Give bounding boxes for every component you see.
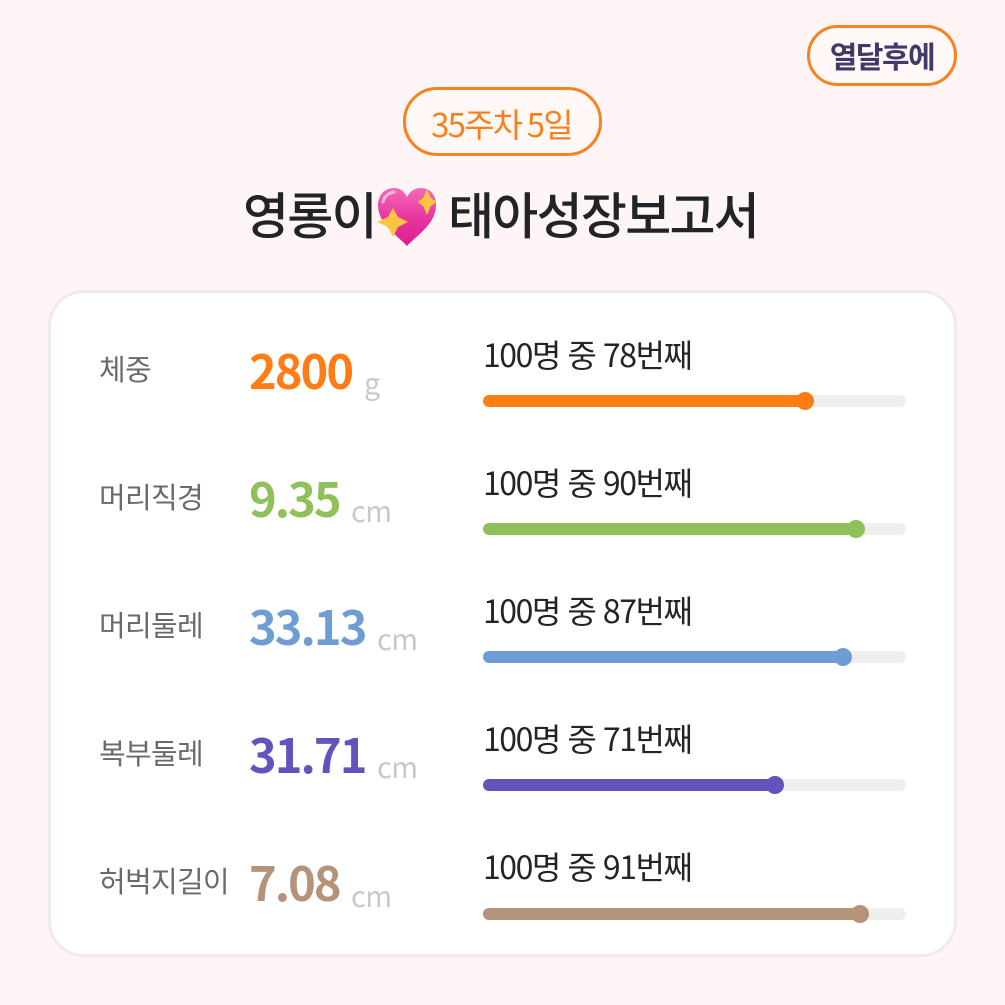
progress bar: abdominal circumference xyxy=(483,779,906,791)
title text: report: 태아성장보고서 xyxy=(448,177,758,249)
unit: cm: cm xyxy=(351,489,392,531)
progress bar: femur length xyxy=(483,908,906,920)
value: femur length: 7.08 xyxy=(249,846,340,915)
unit: cm: cm xyxy=(351,874,392,916)
row: weight xyxy=(99,331,906,410)
rank: head diameter: 100명 중 90번째 xyxy=(483,459,692,505)
label: head diameter: 머리직경 xyxy=(99,475,203,517)
progress bar: head circumference xyxy=(483,651,906,663)
button: after one month: 열달후에 xyxy=(830,33,934,77)
row: head circumference xyxy=(99,587,906,666)
label: weight: 체중 xyxy=(99,347,151,389)
row: abdominal circumference xyxy=(99,715,906,794)
title xyxy=(243,177,758,249)
value: head diameter: 9.35 xyxy=(249,462,340,531)
row: femur length xyxy=(99,843,906,923)
rank: head circumference: 100명 중 87번째 xyxy=(483,587,692,633)
badge: week and day: 35주차 5일 xyxy=(431,99,572,147)
label: femur length: 허벅지길이 xyxy=(99,859,229,901)
unit: cm: cm xyxy=(377,745,418,787)
unit: g: g xyxy=(364,361,380,403)
rank: abdominal circumference: 100명 중 71번째 xyxy=(483,715,692,761)
icon: sparkling heart xyxy=(377,188,436,246)
value: weight: 2800 xyxy=(249,334,352,403)
badge: week and day xyxy=(403,87,602,156)
label: abdominal circumference: 복부둘레 xyxy=(99,731,203,773)
rank: weight: 100명 중 78번째 xyxy=(483,331,692,377)
button: after one month xyxy=(807,25,957,86)
value: abdominal circumference: 31.71 xyxy=(249,718,366,787)
value: head circumference: 33.13 xyxy=(249,590,366,659)
row: head diameter xyxy=(99,459,906,538)
title text: name: 영롱이 xyxy=(243,177,376,249)
progress bar: weight xyxy=(483,395,906,407)
progress bar: head diameter xyxy=(483,523,906,535)
label: head circumference: 머리둘레 xyxy=(99,603,203,645)
unit: cm: cm xyxy=(377,617,418,659)
panel: measurements card xyxy=(48,290,957,957)
rank: femur length: 100명 중 91번째 xyxy=(483,843,692,889)
